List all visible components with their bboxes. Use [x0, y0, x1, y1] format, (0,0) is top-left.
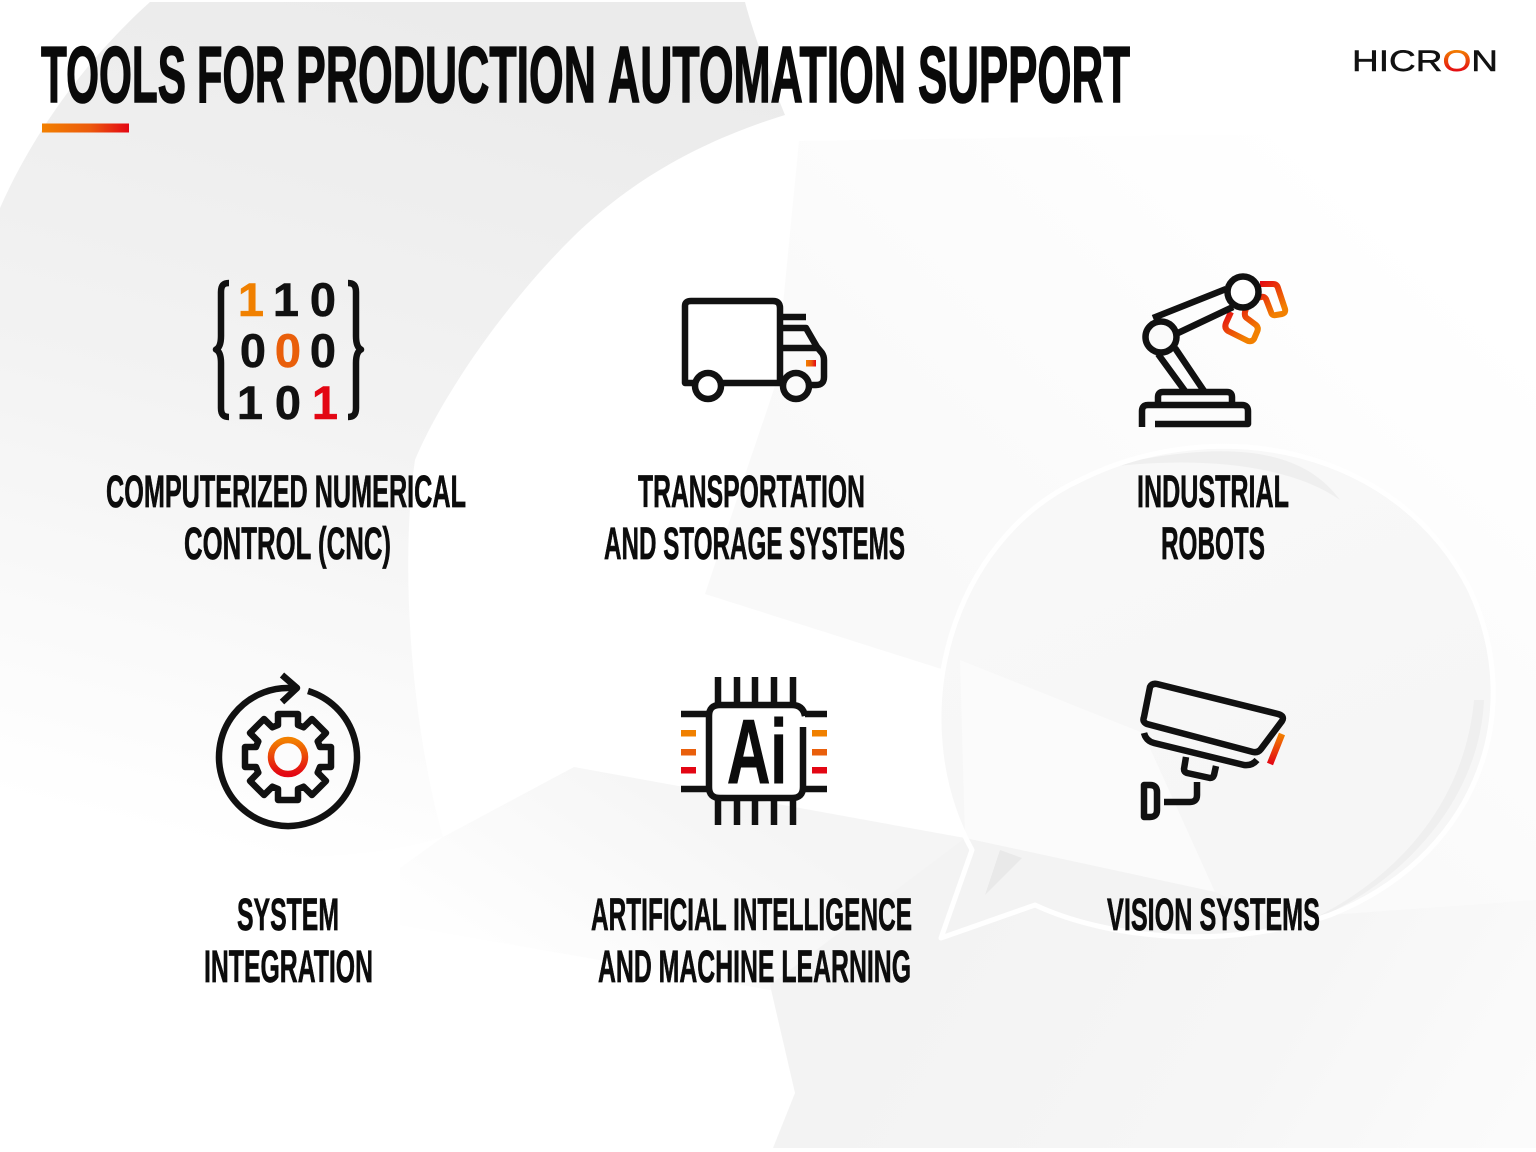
background: right faint panel — [705, 130, 1536, 920]
icon: binary matrix in braces: 0 — [240, 324, 266, 377]
icon: truck — [685, 301, 824, 399]
icon: binary matrix in braces: 1 — [312, 376, 338, 429]
icon: robot arm — [1142, 276, 1285, 427]
background: speech bubble outline — [939, 446, 1493, 938]
icon: binary matrix in braces: 0 — [310, 324, 336, 377]
icon: binary matrix in braces: 0 — [310, 273, 336, 326]
label: robots: ROBOTS — [1161, 518, 1265, 569]
logo: Hicron: HICR ON — [1352, 45, 1498, 78]
label: system integration: SYSTEM — [237, 889, 339, 940]
label: AI: ARTIFICIAL INTELLIGENCE — [591, 889, 912, 940]
title accent bar — [42, 124, 129, 132]
label: CNC: COMPUTERIZED NUMERICAL — [106, 466, 466, 517]
background: large grey curved shape — [0, 2, 785, 857]
icon: AI chip — [681, 677, 827, 825]
label: CNC — [106, 466, 466, 569]
item: system integration — [204, 675, 373, 992]
title: PRODUCTION — [296, 30, 596, 119]
title: FOR — [197, 30, 285, 119]
title: SUPPORT — [918, 30, 1130, 119]
icon: security camera — [1143, 684, 1283, 817]
label: CNC: CONTROL (CNC) — [184, 518, 391, 569]
title — [41, 30, 1130, 119]
label: transportation — [604, 466, 905, 569]
icon: binary matrix in braces: 1 — [237, 376, 263, 429]
background: bottom right grey shape — [770, 838, 1536, 1148]
item: vision systems — [1107, 684, 1320, 940]
icon: binary matrix in braces: 1 — [273, 273, 299, 326]
icon: binary matrix in braces: 0 — [275, 376, 301, 429]
icon: binary matrix in braces: 1 — [238, 273, 264, 326]
item: industrial robots — [1137, 276, 1289, 569]
label: vision systems: VISION SYSTEMS — [1107, 889, 1320, 940]
label: transportation: TRANSPORTATION — [638, 466, 865, 517]
icon: AI chip: Ai — [727, 702, 787, 803]
icon: binary matrix in braces — [216, 273, 361, 429]
title: TOOLS — [41, 30, 186, 119]
title: AUTOMATION — [608, 30, 906, 119]
label: robots — [1137, 466, 1289, 569]
item: AI and machine learning — [591, 677, 912, 992]
background: lower grey band — [400, 767, 1330, 1000]
icon: binary matrix in braces: 0 — [275, 324, 301, 377]
label: robots: INDUSTRIAL — [1137, 466, 1289, 517]
icon: gear with circular arrow — [219, 675, 357, 826]
label: system integration — [204, 889, 373, 992]
label: AI: AND MACHINE LEARNING — [598, 941, 911, 992]
label: AI — [591, 889, 912, 992]
label: system integration: INTEGRATION — [204, 941, 373, 992]
item: computerized numerical control — [106, 273, 466, 569]
label: transportation: AND STORAGE SYSTEMS — [604, 518, 905, 569]
item: transportation and storage — [604, 301, 905, 569]
